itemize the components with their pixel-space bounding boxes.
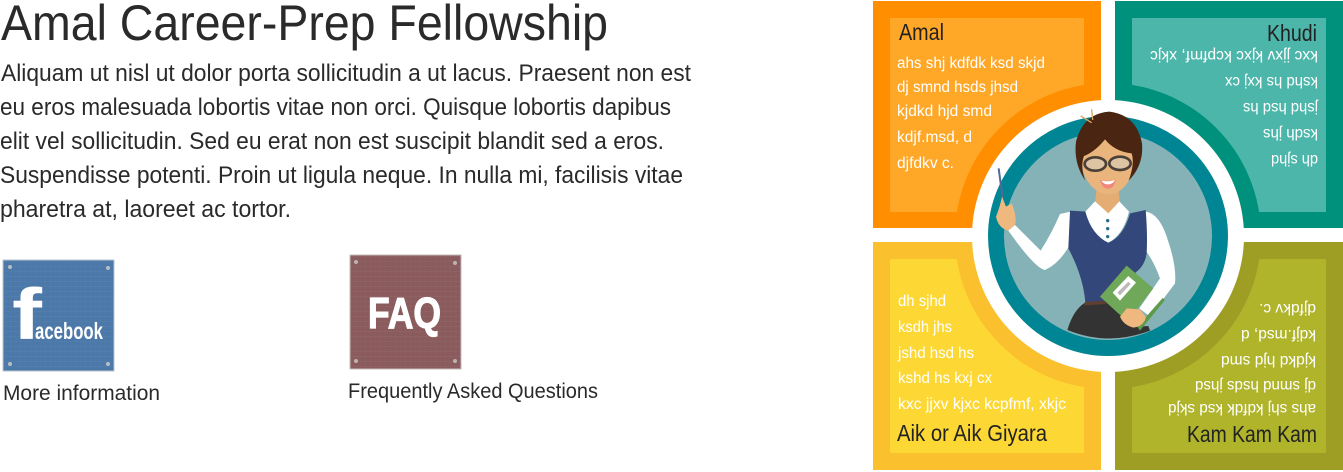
list: Kam Kam Kam items (upside down) [1168, 300, 1316, 417]
list: Amal items [897, 55, 1045, 172]
list: Aik or Aik Giyara items: dh sjhd [898, 293, 946, 310]
illustration: teacher [996, 109, 1175, 339]
list: Amal items: djfdkv c. [897, 155, 954, 172]
list: Aik or Aik Giyara items [897, 293, 1066, 413]
list: Kam Kam Kam items (upside down): kjdkd hjd smd [1221, 352, 1316, 369]
body paragraph: elit vel sollicitudin. Sed eu erat non est suscipit blandit sed a eros. [0, 128, 664, 155]
face [1082, 135, 1134, 194]
raised hand [996, 197, 1016, 231]
list: Aik or Aik Giyara items: ksdh jhs [898, 319, 952, 336]
circle frame [972, 100, 1244, 372]
list: Khudi items (upside down): jshd hsd hs [1243, 99, 1319, 116]
list: Khudi items (upside down): kxc jjxv kjxc kcpfmf, xkjc [1150, 47, 1318, 64]
neck [1095, 188, 1120, 215]
list: Aik or Aik Giyara items: kxc jjxv kjxc kcpfmf, xkjc [898, 396, 1066, 413]
list: Amal items: ahs shj kdfdk ksd skjd [897, 55, 1045, 72]
list: Khudi items (upside down): kshd hs kxj cx [1225, 73, 1318, 90]
list: Kam Kam Kam items (upside down): ahs shj kdfdk ksd skjd [1168, 400, 1316, 417]
left sleeve [1008, 212, 1071, 270]
list: Amal items: kjdkd hjd smd [897, 103, 992, 120]
list: Amal items: kdjf.msd, d [897, 129, 972, 146]
smile [1100, 179, 1116, 189]
list: Aik or Aik Giyara items: jshd hsd hs [897, 345, 974, 362]
body paragraph: eu eros malesuada lobortis vitae non orci. Quisque lobortis dapibus [0, 94, 671, 121]
list: Amal items: dj smnd hsds jhsd [897, 79, 1018, 96]
heading: Aik or Aik Giyara: Aik or Aik Giyara [897, 420, 1047, 446]
icon: facebook badge: f [12, 275, 43, 355]
icon: facebook badge [3, 260, 114, 371]
list: Aik or Aik Giyara items: kshd hs kxj cx [898, 370, 992, 387]
list: Khudi items (upside down) [1150, 47, 1319, 168]
right sleeve [1139, 212, 1175, 317]
panel: Amal [873, 1, 1101, 228]
heading: Khudi: Khudi [1267, 20, 1317, 46]
heading: Amal: Amal [899, 19, 944, 45]
icon: FAQ badge: FAQ [368, 289, 441, 338]
body paragraph: Aliquam ut nisl ut dolor porta sollicitudin a ut lacus. Praesent non est [1, 60, 691, 87]
hair [1076, 112, 1142, 181]
book [1137, 298, 1165, 331]
panel: Khudi [1115, 1, 1343, 228]
pointer [999, 168, 1004, 207]
panel: Kam Kam Kam [1115, 242, 1343, 470]
body paragraph: Suspendisse potenti. Proin ut ligula neque. In nulla mi, facilisis vitae [0, 162, 683, 189]
panel: Aik or Aik Giyara [873, 242, 1101, 470]
list: Kam Kam Kam items (upside down): djfdkv c. [1259, 300, 1316, 317]
icon: facebook badge: acebook [35, 318, 103, 344]
icon: FAQ badge [350, 255, 461, 369]
holding hand [1120, 308, 1146, 328]
glasses [1085, 157, 1131, 171]
caption: more information: More information [3, 382, 160, 405]
list: Kam Kam Kam items (upside down): dj smnd hsds jhsd [1195, 377, 1316, 394]
body paragraph: pharetra at, laoreet ac tortor. [0, 196, 291, 223]
list: Khudi items (upside down): dh sjhd [1271, 151, 1318, 168]
caption: frequently asked questions: Frequently Asked Questions [348, 380, 598, 403]
heading: Kam Kam Kam: Kam Kam Kam [1187, 421, 1317, 447]
belt and skirt [1067, 301, 1150, 339]
list: Khudi items (upside down): ksdh jhs [1263, 125, 1318, 142]
vest [1068, 210, 1147, 303]
shirt collar [1085, 201, 1129, 243]
body paragraph [0, 60, 691, 223]
list: Kam Kam Kam items (upside down): kdjf.msd, d [1241, 326, 1316, 343]
